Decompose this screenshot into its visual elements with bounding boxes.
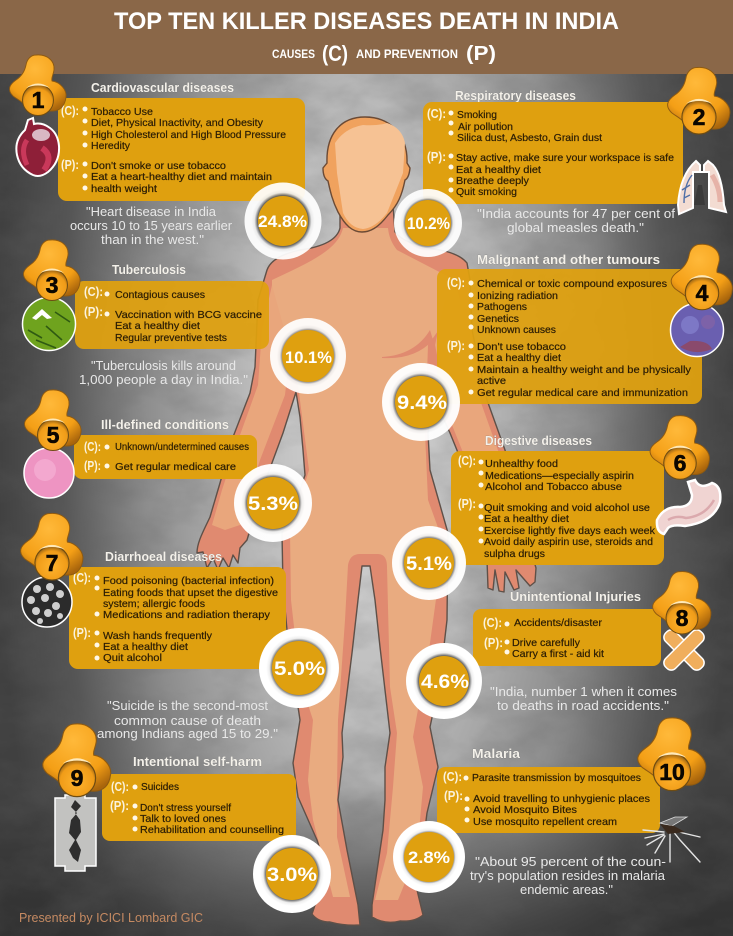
percent badge 5.1%: 5.1% [406,554,452,575]
panel 5: ill-defined conditions: (C): [84,439,101,454]
panel 3: tuberculosis: (C): [84,284,103,299]
panel 6: digestive diseases [451,433,664,565]
header band [0,0,733,74]
quote: tuberculosis: 1,000 people a day in India." [79,372,248,387]
panel 1: cardiovascular diseases: Diet, Physical Inactivity, and Obesity [91,118,264,129]
panel 6: digestive diseases: Avoid daily aspirin use, steroids and [484,537,653,548]
panel 4: malignant and other tumours: Ionizing radiation [477,291,558,302]
percent badge 5.1% [392,526,466,600]
percent badge 10.2%: 10.2% [407,214,450,233]
percent badge 24.8%: 24.8% [258,212,307,231]
quote: heart disease [70,204,233,247]
panel 1: cardiovascular diseases: (C): [61,103,79,118]
panel 9: intentional self-harm: Talk to loved ones [140,814,226,825]
panel 5: ill-defined conditions [74,417,257,479]
quote: suicide: common cause of death [114,713,261,728]
quote: measles: "India accounts for 47 per cent of [477,206,675,221]
panel 5: ill-defined conditions: Ill-defined conditions [101,417,229,432]
panel 8: unintentional injuries: (P): [484,635,503,650]
number badge 7 [21,513,83,580]
quote: measles: global measles death." [507,220,644,235]
panel 3: tuberculosis: Regular preventive tests [115,333,227,344]
chest detail [382,330,433,358]
panel 10: malaria: (P): [444,788,463,803]
panel 4: malignant and other tumours [437,252,702,404]
percent badge 9.4%: 9.4% [397,393,447,414]
panel 10: malaria: Use mosquito repellent cream [473,817,617,828]
percent badge 5.3%: 5.3% [248,494,298,515]
subtitle: (C) [322,41,348,66]
panel 1: cardiovascular diseases: High Cholesterol and High Blood Pressure [91,130,286,141]
panel 2: respiratory diseases: Air pollution [458,122,513,133]
panel 1: cardiovascular diseases: Don't smoke or use tobacco [91,161,226,172]
panel 8: unintentional injuries: Drive carefully [512,638,581,649]
number badge 2 [668,67,730,134]
icon: stomach [657,480,720,534]
panel 1: cardiovascular diseases: Eat a heart-healthy diet and maintain [91,172,272,183]
face [335,123,405,229]
subtitle [272,41,496,66]
panel 5: ill-defined conditions: (P): [84,458,101,473]
number badge 2: 2 [693,104,705,130]
number badge 7: 7 [46,550,58,576]
panel 9: intentional self-harm: Suicides [141,782,179,793]
number badge 8 [653,572,711,634]
number badge 9 [43,724,111,797]
icon: pink tissue [24,448,74,498]
panel 6: digestive diseases: Eat a healthy diet [484,514,569,525]
panel 2: respiratory diseases: (P): [427,149,446,164]
panel 8: unintentional injuries: Accidents/disaster [514,618,603,629]
panel 10: malaria [437,746,660,833]
quote: tuberculosis [79,358,248,387]
number badge 6 [650,416,710,479]
percent badge 10.1% [270,318,346,394]
number badge 6: 6 [674,450,686,476]
arm shading [212,285,520,530]
percent badge 3.0%: 3.0% [267,865,317,886]
quote: tuberculosis: "Tuberculosis kills around [91,358,236,373]
percent badge 5.0% [259,628,339,708]
panel 8: unintentional injuries: (C): [483,615,502,630]
panel 4: malignant and other tumours: active [477,376,506,387]
subtitle: CAUSES [272,47,315,61]
quote: malaria: "About 95 percent of the coun- [475,854,666,869]
icon: heart [16,118,59,176]
panel 3: tuberculosis: (P): [84,304,103,319]
panel 9: intentional self-harm: Rehabilitation and counselling [140,825,284,836]
panel 6: digestive diseases: (C): [458,453,476,468]
panel 7: diarrhoeal diseases: Medications and radiation therapy [103,610,271,621]
panel 4: malignant and other tumours: (P): [447,338,465,353]
number badge 3 [23,240,80,300]
number badge 9: 9 [71,765,83,791]
panel 7: diarrhoeal diseases: (P): [73,625,91,640]
percent badge 10.2% [394,189,462,257]
panel 7: diarrhoeal diseases: Eat a healthy diet [103,642,188,653]
panel 6: digestive diseases: Unhealthy food [485,459,558,470]
panel 4: malignant and other tumours: Genetics [477,314,519,325]
panel 6: digestive diseases: (P): [458,496,476,511]
human body figure [197,117,536,925]
number badge 10 [638,718,706,791]
panel 6: digestive diseases: Digestive diseases [485,433,592,448]
panel 1: cardiovascular diseases: (P): [61,157,79,172]
panel 2: respiratory diseases [423,88,683,204]
panel 2: respiratory diseases: Smoking [457,110,497,121]
subtitle: (P) [466,43,496,65]
quote: suicide [97,698,278,741]
panel 6: digestive diseases: Medications—especially aspirin [485,471,634,482]
panel 4: malignant and other tumours: Don't use tobacco [477,342,566,353]
panel 7: diarrhoeal diseases: system; allergic foods [103,599,205,610]
quote: road accidents [490,684,678,713]
icon: mosquito [643,817,700,862]
number badge 5 [24,390,81,450]
panel 2: respiratory diseases: Quit smoking [456,187,517,198]
panel 4: malignant and other tumours: Maintain a healthy weight and be physically [477,365,692,376]
number badge 4 [671,244,732,310]
panel 6: digestive diseases: Alcohol and Tobacco abuse [485,482,622,493]
panel 3: tuberculosis: Vaccination with BCG vaccine [115,310,262,321]
panel 9: intentional self-harm [102,754,296,841]
panel 10: malaria: Malaria [472,746,521,761]
panel 3: tuberculosis [75,262,269,349]
panel 3: tuberculosis: Eat a healthy diet [115,321,200,332]
panel 2: respiratory diseases: Silica dust, Asbesto, Grain dust [457,133,602,144]
subtitle: AND PREVENTION [356,47,458,61]
number badge 3: 3 [46,272,58,298]
percent badge 2.8% [393,821,465,893]
body silhouette [197,205,536,925]
percent badge 10.1%: 10.1% [285,348,332,367]
number badge 10: 10 [659,759,685,785]
panel 9: intentional self-harm: (P): [110,798,129,813]
panel 2: respiratory diseases: Breathe deeply [456,176,530,187]
panel 8: unintentional injuries: Unintentional Injuries [510,589,641,604]
number badge 5: 5 [47,422,60,448]
number badge 8: 8 [676,605,689,631]
panel 7: diarrhoeal diseases: Eating foods that upset the digestive [103,588,278,599]
panel 10: malaria: Avoid Mosquito Bites [473,805,577,816]
number badge 1: 1 [32,87,45,113]
panel 1: cardiovascular diseases [58,80,305,201]
quote: suicide: among Indians aged 15 to 29." [97,726,278,741]
percent badge 5.0%: 5.0% [274,659,325,680]
panel 7: diarrhoeal diseases: Diarrhoeal diseases [105,549,222,564]
panel 8: unintentional injuries: Carry a first - aid kit [512,649,604,660]
panel 7: diarrhoeal diseases: (C): [73,570,91,585]
panel 4: malignant and other tumours: Chemical or toxic compound exposures [477,279,667,290]
panel 4: malignant and other tumours: Unknown causes [477,325,556,336]
panel 7: diarrhoeal diseases: Quit alcohol [103,653,162,664]
quote: suicide: "Suicide is the second-most [107,698,268,713]
quote: malaria: try's population resides in malaria [470,868,666,883]
panel 4: malignant and other tumours: Malignant and other tumours [477,252,660,267]
panel 9: intentional self-harm: Intentional self-harm [133,754,262,769]
panel 4: malignant and other tumours: (C): [447,275,465,290]
panel 8: unintentional injuries [473,589,661,666]
panel 10: malaria: (C): [443,769,462,784]
panel 5: ill-defined conditions: Get regular medical care [115,462,236,473]
percent badge 3.0% [253,835,331,913]
panel 7: diarrhoeal diseases: Wash hands frequently [103,631,213,642]
percent badge 4.6% [406,643,482,719]
panel 9: intentional self-harm: (C): [111,779,129,794]
quote: malaria: endemic areas." [520,882,613,897]
torso and legs shading [272,228,460,900]
icon: razor blade [55,795,96,871]
panel 4: malignant and other tumours: Eat a healthy diet [477,353,561,364]
percent badge 9.4% [382,363,460,441]
panel 1: cardiovascular diseases: Cardiovascular diseases [91,80,234,95]
number badge 4: 4 [696,280,709,306]
quote: heart disease: occurs 10 to 15 years earlier [70,218,233,233]
panel 9: intentional self-harm: Don't stress yourself [140,803,231,814]
panel 2: respiratory diseases: Respiratory diseases [455,88,576,103]
panel 5: ill-defined conditions: Unknown/undetermined causes [115,442,249,453]
quote: road accidents: to deaths in road accidents." [497,698,669,713]
panel 4: malignant and other tumours: Get regular medical care and immunization [477,388,688,399]
quote: measles [477,206,675,235]
panel 7: diarrhoeal diseases: Food poisoning (bacterial infection) [103,576,274,587]
panel 4: malignant and other tumours: Pathogens [477,302,527,313]
icon: lungs [678,161,726,214]
panel 7: diarrhoeal diseases [69,549,286,669]
panel 1: cardiovascular diseases: Tobacco Use [91,107,153,118]
panel 6: digestive diseases: Exercise lightly five days each week [484,526,656,537]
quote: heart disease: "Heart disease in India [86,204,217,219]
percent badge 2.8%: 2.8% [408,848,450,867]
panel 1: cardiovascular diseases: health weight [91,184,157,195]
quote: road accidents: "India, number 1 when it comes [490,684,678,699]
panel 10: malaria: Avoid travelling to unhygienic places [473,794,650,805]
quote: heart disease: than in the west." [101,232,204,247]
panel 2: respiratory diseases: Stay active, make sure your workspace is safe [456,153,674,164]
number badge 1 [9,55,66,116]
icon: tumour tissue [670,304,724,356]
panel 6: digestive diseases: Quit smoking and void alcohol use [484,503,650,514]
panel 1: cardiovascular diseases: Heredity [91,141,131,152]
head [323,117,410,232]
panel 2: respiratory diseases: (C): [427,106,446,121]
panel 2: respiratory diseases: Eat a healthy diet [456,165,541,176]
panel 10: malaria: Parasite transmission by mosquitoes [472,773,641,784]
percent badge 24.8% [244,182,322,260]
icon: crossed plasters [661,627,707,673]
panel 6: digestive diseases: sulpha drugs [484,549,545,560]
percent badge 4.6%: 4.6% [421,672,469,693]
percent badge 5.3% [234,464,312,542]
panel 3: tuberculosis: Contagious causes [115,290,205,301]
quote: malaria [470,854,666,897]
credit line: Presented by ICICI Lombard GIC [19,910,203,925]
title: TOP TEN KILLER DISEASES DEATH IN INDIA [114,8,619,35]
panel 3: tuberculosis: Tuberculosis [112,262,186,277]
icon: bacteria spheres [22,577,72,627]
icon: tuberculosis bacteria [22,298,76,350]
